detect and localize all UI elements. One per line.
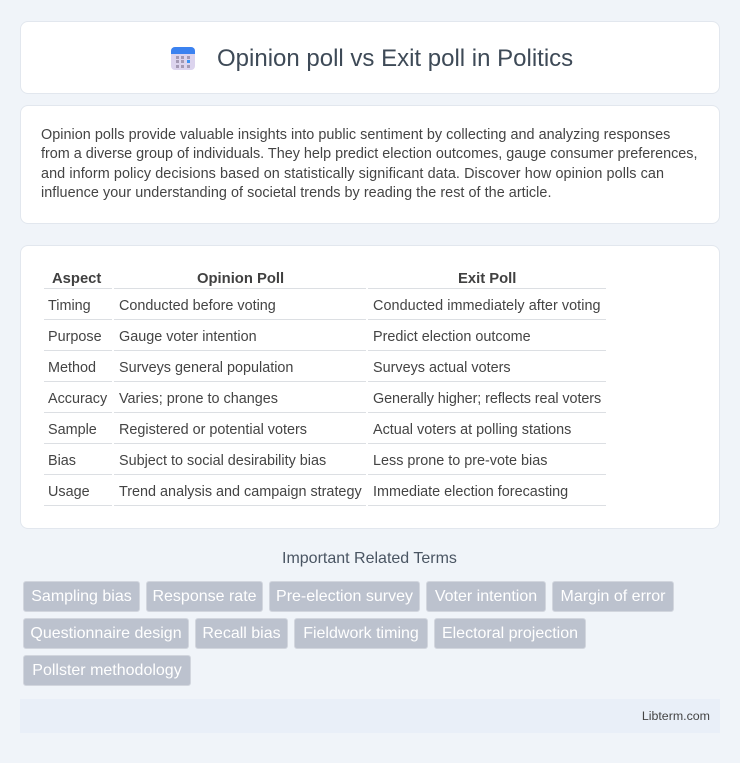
header panel	[20, 21, 720, 94]
related term tags: Voter intention	[435, 588, 537, 605]
comparison table: Surveys actual voters	[373, 360, 511, 376]
comparison table: Usage	[48, 484, 90, 500]
comparison table: Less prone to pre-vote bias	[373, 453, 547, 469]
related term tags: Pollster methodology	[32, 662, 182, 679]
comparison table: Opinion Poll	[197, 271, 284, 287]
comparison table: Accuracy	[48, 391, 107, 407]
comparison table: Conducted before voting	[119, 298, 276, 314]
comparison table: Varies; prone to changes	[119, 391, 278, 407]
comparison table: Immediate election forecasting	[373, 484, 568, 500]
comparison table: Sample	[48, 422, 97, 438]
comparison table: Timing	[48, 298, 91, 314]
comparison table panel	[20, 245, 720, 529]
related term tags: Margin of error	[561, 588, 665, 605]
related term tags: Pre-election survey	[276, 588, 413, 605]
comparison table: Conducted immediately after voting	[373, 298, 601, 314]
footer credit: Libterm.com	[642, 709, 710, 723]
comparison table: Actual voters at polling stations	[373, 422, 571, 438]
related term tags: Sampling bias	[31, 588, 132, 605]
comparison table: Registered or potential voters	[119, 422, 307, 438]
title: Opinion poll vs Exit poll in Politics	[217, 45, 573, 72]
related term tags: Recall bias	[202, 625, 281, 642]
comparison table: Gauge voter intention	[119, 329, 257, 345]
related terms heading: Important Related Terms	[282, 550, 457, 567]
related term tags	[23, 581, 674, 686]
intro paragraph: influence your understanding of societal trends by reading the rest of the article.	[41, 185, 552, 201]
intro text panel	[20, 105, 720, 224]
footer bar	[20, 699, 720, 733]
related term tags: Electoral projection	[442, 625, 578, 642]
comparison table	[44, 271, 606, 506]
icon: calendar	[171, 47, 195, 70]
comparison table: Bias	[48, 453, 76, 469]
comparison table: Aspect	[52, 271, 101, 287]
comparison table: Predict election outcome	[373, 329, 531, 345]
intro paragraph: from a diverse group of individuals. They help predict election outcomes, gauge consumer preferences,	[41, 146, 697, 162]
intro paragraph: and inform policy decisions based on statistically significant data. Discover how opinion polls can	[41, 166, 664, 182]
comparison table: Subject to social desirability bias	[119, 453, 326, 469]
related term tags: Response rate	[152, 588, 257, 605]
comparison table: Exit Poll	[458, 271, 516, 287]
comparison table: Generally higher; reflects real voters	[373, 391, 601, 407]
comparison table: Surveys general population	[119, 360, 293, 376]
comparison table: Purpose	[48, 329, 102, 345]
related term tags: Questionnaire design	[30, 625, 182, 642]
intro paragraph: Opinion polls provide valuable insights into public sentiment by collecting and analyzing responses	[41, 127, 670, 143]
intro paragraph	[41, 127, 697, 201]
related term tags: Fieldwork timing	[303, 625, 419, 642]
comparison table: Trend analysis and campaign strategy	[119, 484, 362, 500]
comparison table: Method	[48, 360, 96, 376]
